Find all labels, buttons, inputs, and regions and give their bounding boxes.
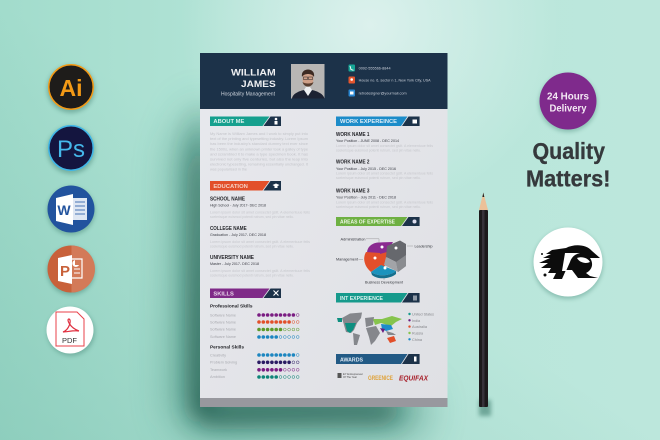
work entries: WORK NAME 3 <box>336 188 370 194</box>
about me text: the 1500s, when an unknown printer took a galley of type <box>210 147 308 151</box>
name: WILLIAM <box>231 68 276 78</box>
education entries: High School - July 2017- DEC 2018 <box>210 204 266 208</box>
skills list: Software Name <box>210 328 236 332</box>
heading: education <box>210 181 281 190</box>
contact email <box>348 90 407 96</box>
heading: int experience <box>336 293 420 302</box>
contact phone <box>348 64 391 72</box>
about me text: and scrambled it to make a type specimen book. It has <box>210 152 308 156</box>
logo shadow <box>533 229 603 299</box>
work entries: scelerisque euismod potenti rutrum, sed pin vitae nellu. <box>336 205 421 209</box>
heading: quality matters: Matters! <box>526 166 610 192</box>
heading: skills <box>210 288 281 298</box>
heading: quality matters: Quality <box>532 138 605 164</box>
skills list: Software Name <box>210 313 236 317</box>
photo <box>291 64 324 98</box>
skills list: Software Name <box>210 335 236 339</box>
heading: about me <box>210 116 281 126</box>
pie labels: Business Development <box>365 279 404 284</box>
about me text: My Name is William James and I work to simply put into <box>210 132 308 136</box>
pie slice: grey <box>386 240 406 272</box>
heading: work experience <box>336 116 420 126</box>
map legend: China <box>412 338 423 342</box>
work entries: Lorem ipsum dolor sit amet consectet gslit. A elementuue felis <box>336 201 433 205</box>
work entries: WORK NAME 2 <box>336 160 370 166</box>
skill dots row 7 <box>257 368 299 372</box>
header band: JAMES <box>241 79 276 89</box>
education entries: SCHOOL NAME <box>210 196 246 202</box>
award logos <box>338 372 429 382</box>
badge: 24 hours delivery: 24 Hours <box>547 92 589 102</box>
work entries: Your Position - July 2011 - DEC 2018 <box>336 196 396 200</box>
heading: areas of expertise: AREAS OF EXPERTISE <box>340 220 395 226</box>
work entries: Lorem ipsum dolor sit amet consectet gslit. A elementuue felis <box>336 172 433 176</box>
skill dots row 4 <box>257 335 299 339</box>
map legend: India <box>412 319 421 323</box>
heading: areas of expertise <box>336 217 420 226</box>
map legend: Russia <box>412 332 424 336</box>
award logos: Of The Year <box>343 375 357 379</box>
skills list: Problem Solving <box>210 360 237 364</box>
award logos: EQUIFAX <box>399 374 429 382</box>
skills list <box>210 304 299 379</box>
heading: work experience: WORK EXPEREINCE <box>340 119 397 125</box>
icon: Word: W <box>57 202 71 218</box>
footer strip <box>200 398 448 407</box>
about me text: has been the industry's standard dummy text ever since <box>210 142 308 146</box>
icon: PowerPoint <box>47 246 95 295</box>
contact address <box>348 76 431 84</box>
work entries: scelerisque euismod potenti rutrum, sed pin vitae nellu. <box>336 176 421 180</box>
about me text: was popularised in the <box>210 168 247 172</box>
resume sheet <box>200 53 448 407</box>
work entries: scelerisque euismod potenti rutrum, sed pin vitae nellu. <box>336 148 421 152</box>
expertise pie chart <box>364 240 406 278</box>
education entries: Lorem ipsum dolor sit amet consectet gslit. A elementuue felis <box>210 269 310 273</box>
skill dots row 6 <box>257 360 299 364</box>
contact address: House no. 6, sector n 1, New York City, USA <box>359 78 431 82</box>
work entries <box>336 132 433 209</box>
badge shadow <box>539 74 597 132</box>
map legend: United States <box>412 312 434 316</box>
education entries: UNIVERSITY NAME <box>210 255 255 261</box>
map legend: Australia <box>412 325 428 329</box>
about me text: text of the printing and typesetting industry. Lorem Ipsum <box>210 137 308 141</box>
seller logo <box>534 228 602 296</box>
header band <box>200 53 448 109</box>
skill dots row 2 <box>257 320 299 324</box>
paper <box>200 53 448 407</box>
pie labels: Leadership <box>414 244 432 248</box>
heading: education: EDUCATION <box>213 184 248 190</box>
pie slice: purple <box>367 242 393 254</box>
pencil <box>479 192 488 407</box>
skills list: Ambition <box>210 375 225 379</box>
education entries: Lorem ipsum dolor sit amet consectet gslit. A elementuue felis <box>210 210 310 214</box>
award logos: GREENICE <box>368 375 393 382</box>
heading: int experience: INT EXPERIENCE <box>340 296 383 302</box>
education entries: scelerisque euismod potenti rutrum, sed pin vitae nellu. <box>210 215 294 219</box>
about me text: survived not only five centuries, but also the leap into <box>210 158 308 162</box>
heading: skills: SKILLS <box>213 291 234 297</box>
icon: Photoshop <box>47 126 95 174</box>
icon: Photoshop: Ps <box>57 136 85 163</box>
contact email: retrodesigner@yourmail.com <box>359 91 407 95</box>
pencil shadow <box>479 400 491 416</box>
education entries: COLLEGE NAME <box>210 226 247 232</box>
work entries: Lorem ipsum dolor sit amet consectet gslit. A elementuue felis <box>336 144 433 148</box>
icon: PDF <box>46 306 95 356</box>
pie labels: Administration <box>340 236 366 241</box>
skill dots row 1 <box>257 313 299 317</box>
heading: awards <box>336 354 420 364</box>
contact phone: 0092-555566-8844 <box>359 66 391 70</box>
icon: Illustrator <box>47 65 95 113</box>
pie centre fill <box>378 251 388 266</box>
skills list: Creativity <box>210 354 226 358</box>
skills list: Software Name <box>210 320 236 324</box>
education entries: Lorem ipsum dolor sit amet consectet gslit. A elementuue felis <box>210 240 310 244</box>
world map <box>337 312 402 345</box>
wide paper shadow <box>172 100 430 436</box>
education entries: Master - July 2017- DEC 2018 <box>210 262 259 266</box>
about me text <box>210 132 308 172</box>
icon: PDF: PDF <box>62 336 77 345</box>
heading: quality matters <box>526 138 610 192</box>
award logos: EY Entrepreneur <box>343 372 363 376</box>
work entries: WORK NAME 1 <box>336 132 370 138</box>
heading: awards: AWARDS <box>340 357 363 363</box>
badge: 24 hours delivery: Delivery <box>550 104 587 114</box>
skill dots row 5 <box>257 353 299 357</box>
icon: Illustrator: Ai <box>60 75 82 101</box>
pie slice: blue <box>371 265 396 275</box>
education entries: Graduation - July 2017- DEC 2018 <box>210 233 266 237</box>
skills list: Personal Skills <box>210 344 244 350</box>
education entries: scelerisque euismod potenti rutrum, sed pin vitae nellu. <box>210 244 294 248</box>
paper shadow <box>192 110 405 422</box>
work entries: Your Position - JUNE 2008 - DEC 2014 <box>336 139 399 143</box>
education entries <box>210 196 310 278</box>
education entries: scelerisque euismod potenti rutrum, sed pin vitae nellu. <box>210 274 294 278</box>
skill dots row 8 <box>257 375 299 379</box>
icon: Word <box>47 186 95 235</box>
map legend <box>408 312 434 342</box>
skills list: Teamwork <box>210 368 227 372</box>
heading: about me: ABOUT ME <box>213 119 245 125</box>
about me text: electronic typesetting, remaining essentially unchanged. It <box>210 163 308 167</box>
badge: 24 hours delivery <box>540 72 596 130</box>
icon: PowerPoint: P <box>60 263 70 280</box>
skills list: Professional Skills <box>210 304 253 310</box>
work entries: Your Position - July 2015 - DEC 2016 <box>336 167 396 171</box>
job title: Hospitality Management <box>221 92 276 98</box>
pie slice: red <box>364 252 381 272</box>
pie labels <box>336 236 432 284</box>
skill dots row 3 <box>257 328 299 331</box>
pie labels: Management <box>336 256 359 262</box>
